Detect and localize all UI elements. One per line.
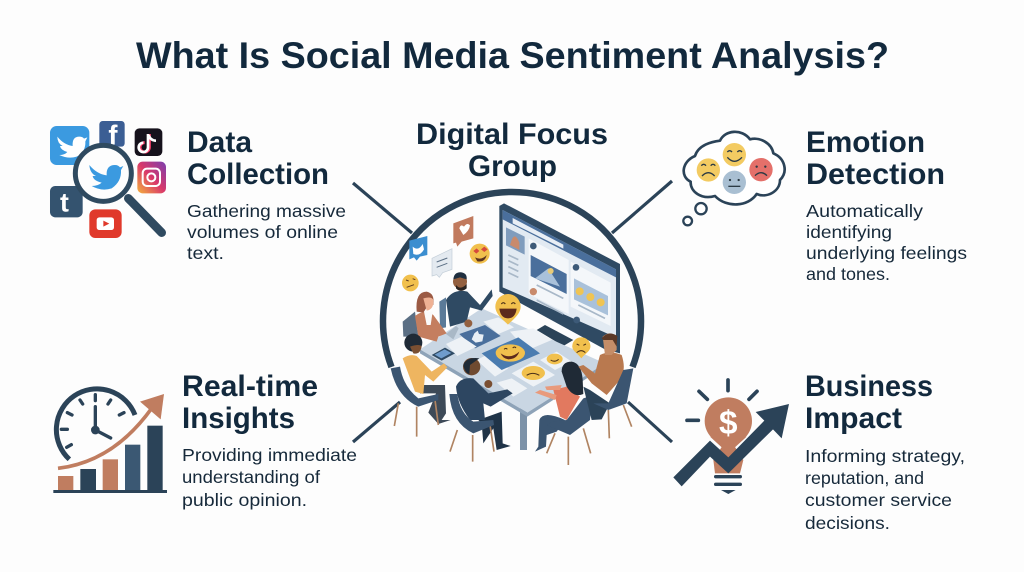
icon: social media magnifier: f [108,119,118,150]
heading: business impact: Impact [805,402,902,435]
icon: light bulb with dollar and arrow: $ [719,405,738,442]
text: business impact: reputation, and [805,468,924,488]
panel: data collection [50,119,346,263]
heading: real-time insights: Insights [182,402,295,435]
title: What Is Social Media Sentiment Analysis? [136,35,889,76]
text: emotion detection: identifying [806,222,892,242]
panel: business impact [673,370,965,533]
person: woman in coral [535,362,592,465]
table [420,308,605,450]
panel: real-time insights [53,370,357,510]
icon: social media magnifier: t [60,188,69,218]
text: data collection [187,201,346,263]
central illustration ring [383,192,641,367]
person: man in brown [578,333,633,438]
text: business impact: customer service [805,490,952,510]
emoji above table [495,294,590,358]
icon: thought bubble with emotions [683,132,785,225]
heading: emotion detection [806,126,945,191]
monitor [499,203,620,353]
text: business impact: Informing strategy, [805,446,965,466]
text: real-time insights [182,445,357,510]
text: emotion detection [806,201,967,284]
heading: real-time insights [182,370,318,435]
icon: clock with rising bars [53,389,167,493]
text: data collection: Gathering massive [187,201,346,221]
center heading: Digital Focus [416,118,608,151]
heading: real-time insights: Real-time [182,370,318,403]
text: emotion detection: underlying feelings [806,243,967,263]
text: business impact: decisions. [805,513,890,533]
icon: light bulb with dollar and arrow [673,380,789,494]
person: person in yellow [391,334,451,437]
heading: data collection: Collection [187,158,329,191]
text: data collection: text. [187,243,224,263]
panel: emotion detection [683,126,967,284]
text: data collection: volumes of online [187,222,338,242]
center heading [416,118,608,183]
person: woman in blazer [403,292,447,342]
floating emoji and chat bubbles [402,216,590,358]
center heading: Group [468,150,557,183]
heading: data collection [187,126,329,191]
heading: data collection: Data [187,126,252,159]
text: real-time insights: public opinion. [182,490,307,510]
heading: emotion detection: Detection [806,158,945,191]
text: emotion detection: and tones. [806,264,890,284]
heading: business impact: Business [805,370,933,403]
text: business impact [805,446,965,533]
heading: business impact [805,370,933,435]
text: emotion detection: Automatically [806,201,923,221]
person: man with beard [439,272,493,328]
person: man in navy [449,358,513,462]
connector lines [353,181,672,442]
text: real-time insights: understanding of [182,467,320,487]
central illustration: focus group [391,203,633,465]
heading: emotion detection: Emotion [806,126,925,159]
text: real-time insights: Providing immediate [182,445,357,465]
icon: social media magnifier [50,119,166,238]
